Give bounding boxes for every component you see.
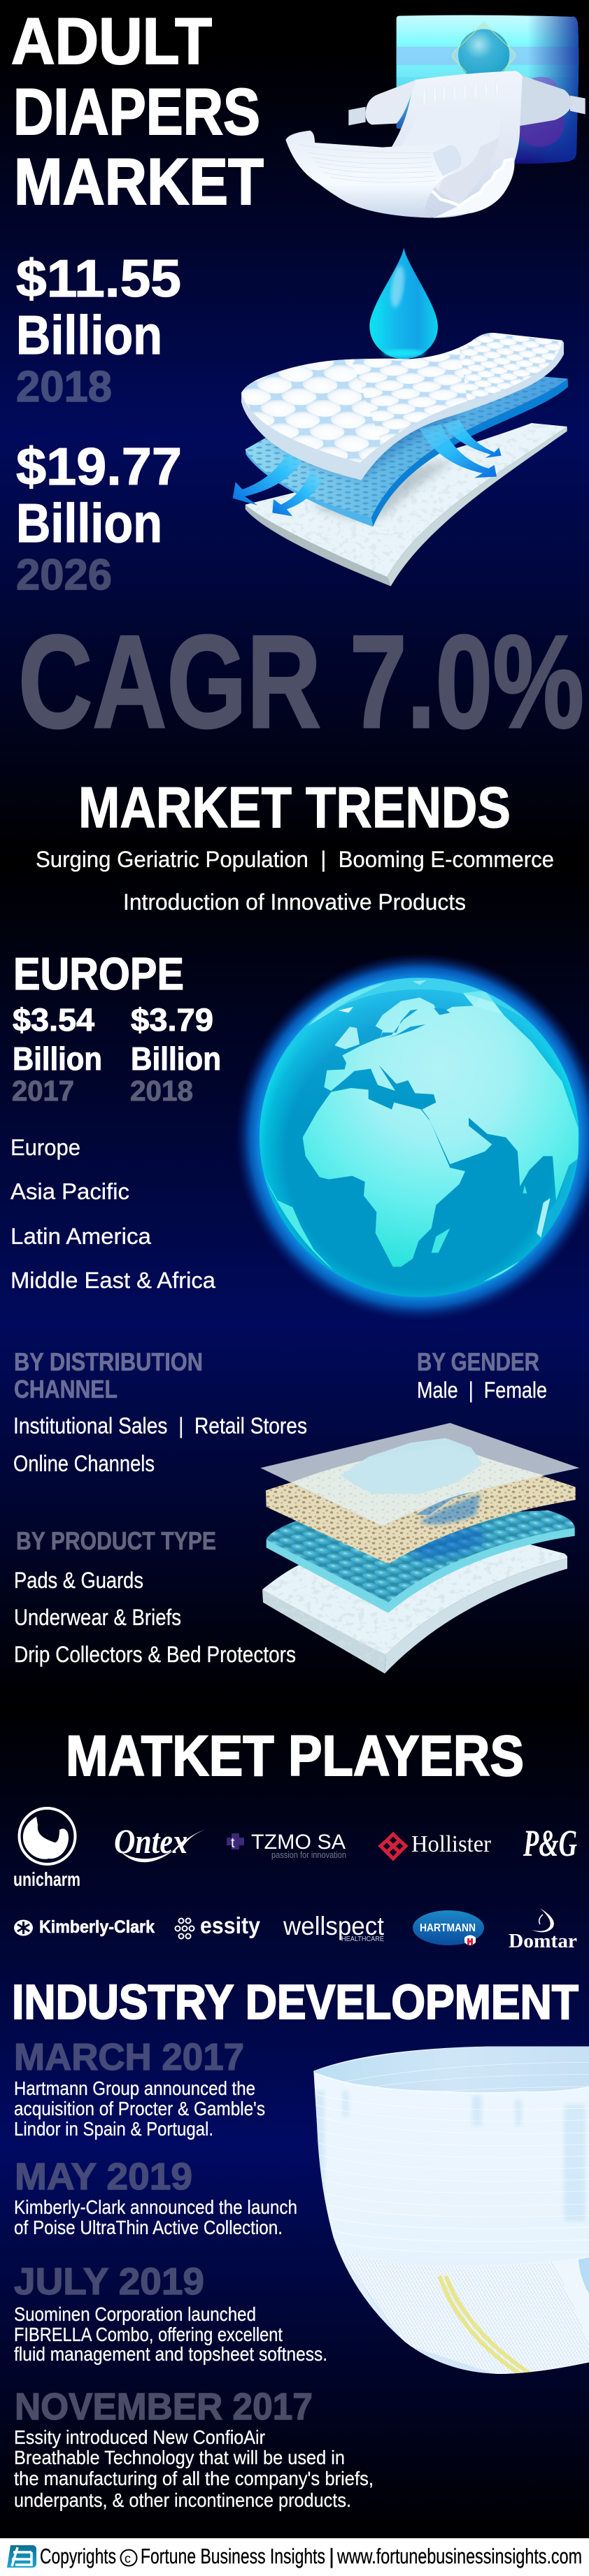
sponge layer xyxy=(266,1445,576,1564)
icon: Fortune Business Insights logo xyxy=(7,2545,36,2568)
stat: Europe 2017 xyxy=(12,1002,102,1107)
bottom sheet xyxy=(246,423,567,586)
text block: by gender: BY GENDER xyxy=(417,1347,539,1376)
blue bubble layer xyxy=(267,1510,575,1613)
milestone: November 2017: Breathable Technology that will be used in xyxy=(14,2447,345,2468)
region list xyxy=(10,1135,215,1293)
region list: Middle East & Africa xyxy=(10,1268,215,1293)
milestone: November 2017 xyxy=(14,2386,374,2511)
text block: by gender: Male | Female xyxy=(417,1378,547,1403)
trends list: Surging Geriatric Population | Booming E-commerce xyxy=(36,847,554,872)
stat: Europe 2017: 2017 xyxy=(12,1075,74,1107)
panel: market trends xyxy=(36,775,554,915)
panel: market size header xyxy=(11,4,586,756)
panel: market players xyxy=(13,1724,577,1952)
milestone: May 2019: of Poise UltraThin Active Collection. xyxy=(14,2217,283,2238)
quilted top layer xyxy=(224,331,574,480)
copyright text: Copyrights xyxy=(40,2544,116,2568)
panel: segmentation xyxy=(13,1347,579,1673)
stat: 2018 market value xyxy=(16,249,181,411)
heading: MARKET TRENDS xyxy=(78,775,511,840)
stat: Europe 2018: Billion xyxy=(131,1040,221,1077)
logo: Wellspect: HEALTHCARE xyxy=(341,1935,384,1943)
milestone: May 2019: MAY 2019 xyxy=(15,2156,192,2198)
illustration: glowing globe xyxy=(235,953,589,1322)
illustration: pull-up brief xyxy=(313,2047,589,2375)
milestone: November 2017: the manufacturing of all the company's briefs, xyxy=(14,2468,374,2489)
logo: Domtar: Domtar xyxy=(509,1930,577,1952)
stat: 2018 market value: $11.55 xyxy=(16,249,181,308)
milestone: March 2017 xyxy=(14,2036,265,2140)
logo: Hartmann: HARTMANN xyxy=(420,1922,476,1934)
milestone: March 2017: Hartmann Group announced the xyxy=(14,2077,255,2099)
copyright text: | xyxy=(329,2544,334,2568)
milestone: July 2019 xyxy=(14,2261,327,2365)
logo: essity xyxy=(175,1912,261,1938)
stat: 2018 market value: 2018 xyxy=(16,363,112,411)
water drop xyxy=(369,248,438,359)
illustration: diaper with package xyxy=(285,15,586,218)
text block: by product type: Underwear & Briefs xyxy=(14,1605,181,1630)
milestone: May 2019: Kimberly-Clark announced the launch xyxy=(14,2196,297,2218)
text block: by distribution channel: Online Channels xyxy=(13,1451,155,1476)
stat: Europe 2018: $3.79 xyxy=(131,1002,213,1038)
title xyxy=(11,4,264,218)
text block: by product type: Pads & Guards xyxy=(14,1568,143,1593)
milestone: July 2019: fluid management and topsheet softness. xyxy=(14,2343,327,2365)
logo: TZMO SA: passion for innovation xyxy=(271,1849,346,1860)
milestone: July 2019: FIBRELLA Combo, offering excellent xyxy=(14,2324,283,2345)
text block: by distribution channel: Institutional Sales | Retail Stores xyxy=(13,1413,307,1438)
heading: EUROPE xyxy=(13,948,184,999)
diaper xyxy=(285,71,586,218)
logo: essity: essity xyxy=(200,1912,261,1938)
text block: by product type xyxy=(14,1526,296,1667)
footer xyxy=(0,2538,589,2576)
milestone: May 2019 xyxy=(14,2156,297,2238)
milestone: March 2017: Lindor in Spain & Portugal. xyxy=(14,2118,213,2140)
stat: Europe 2017: Billion xyxy=(13,1040,102,1077)
title: ADULT xyxy=(11,4,212,78)
logo: TZMO SA: t xyxy=(231,1836,235,1851)
title: MARKET xyxy=(14,145,264,218)
milestone: July 2019: Suominen Corporation launched xyxy=(14,2303,256,2325)
stat: 2026 market value xyxy=(16,437,182,599)
logo: Ontex: Ontex xyxy=(114,1822,187,1861)
logo: Unicharm xyxy=(13,1808,80,1890)
region list: Europe xyxy=(10,1135,80,1160)
translucent top sheet xyxy=(260,1423,579,1526)
copyright text xyxy=(40,2544,582,2568)
logo: Hollister xyxy=(381,1831,492,1859)
mottled base layer xyxy=(262,1544,567,1673)
text block: by gender xyxy=(417,1347,547,1403)
trends list: Introduction of Innovative Products xyxy=(123,889,466,915)
logo: TZMO SA: TZMO SA xyxy=(251,1831,346,1854)
milestone: July 2019: JULY 2019 xyxy=(14,2261,204,2303)
copyright text: c xyxy=(125,2552,131,2566)
middle dotted layer xyxy=(246,375,568,527)
stat: 2026 market value: 2026 xyxy=(16,551,112,599)
stat: Europe 2018 xyxy=(130,1002,221,1107)
package xyxy=(397,15,579,164)
illustration: water drop and absorbent layers xyxy=(224,248,574,586)
logo: Kimberly-Clark: Kimberly-Clark xyxy=(39,1917,155,1937)
stat: 2026 market value: Billion xyxy=(16,492,162,554)
region list: Asia Pacific xyxy=(10,1179,129,1204)
logo: Domtar xyxy=(509,1908,577,1952)
text block: by product type: Drip Collectors & Bed Protectors xyxy=(14,1642,296,1667)
stat: 2026 market value: $19.77 xyxy=(16,437,182,496)
text block: by distribution channel xyxy=(13,1347,307,1476)
illustration: exploded product layers xyxy=(260,1423,579,1673)
panel: regional analysis xyxy=(10,948,589,1322)
arrows xyxy=(233,420,502,516)
stat: Europe 2017: $3.54 xyxy=(13,1002,94,1038)
milestone: November 2017: NOVEMBER 2017 xyxy=(15,2386,313,2428)
logo: Hollister: Hollister xyxy=(411,1831,492,1857)
text block: by distribution channel: CHANNEL xyxy=(14,1375,118,1403)
logo: Unicharm: unicharm xyxy=(13,1868,80,1890)
copyright text: Fortune Business Insights xyxy=(141,2544,325,2568)
text block: by product type: BY PRODUCT TYPE xyxy=(16,1526,216,1555)
milestone: March 2017: acquisition of Procter & Gamble's xyxy=(14,2098,265,2119)
milestone: November 2017: Essity introduced New ConfioAir xyxy=(14,2426,265,2448)
milestone: November 2017: underpants, & other incontinence products. xyxy=(14,2489,351,2511)
logo: Wellspect: wellspect xyxy=(283,1912,385,1940)
region list: Latin America xyxy=(10,1224,151,1249)
logo: Hartmann xyxy=(413,1910,484,1945)
panel: industry development xyxy=(12,1975,589,2511)
text block: by distribution channel: BY DISTRIBUTION xyxy=(14,1347,203,1376)
title: DIAPERS xyxy=(13,75,260,148)
trends list xyxy=(36,847,554,915)
logo: TZMO SA xyxy=(227,1831,346,1860)
milestone: March 2017: MARCH 2017 xyxy=(14,2036,244,2078)
stat: 2018 market value: Billion xyxy=(16,304,162,366)
stat: Europe 2018: 2018 xyxy=(130,1075,193,1107)
heading: MATKET PLAYERS xyxy=(66,1724,524,1788)
